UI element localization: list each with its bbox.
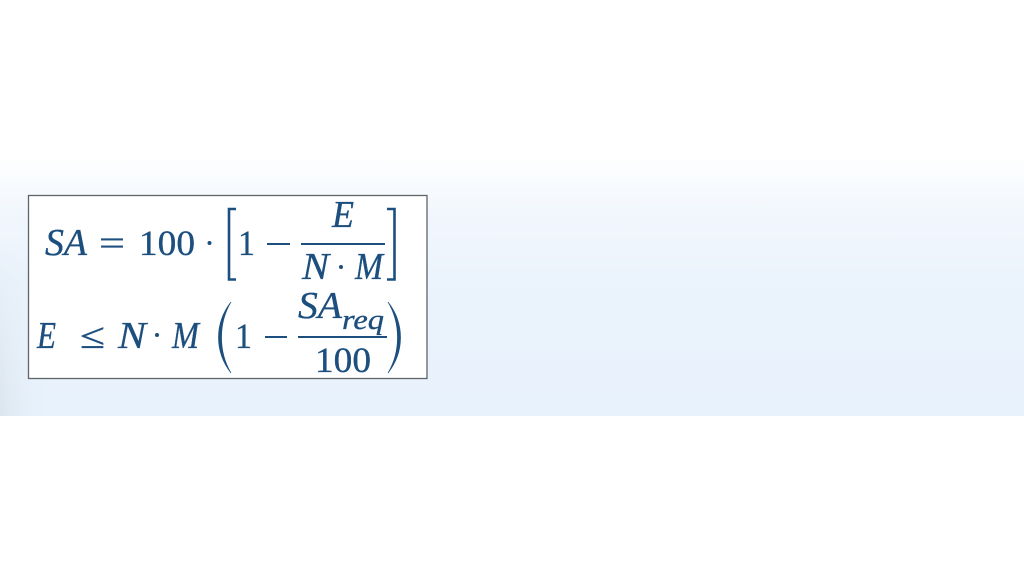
equation: error budget: req <box>342 305 384 336</box>
formula panel <box>28 194 427 380</box>
equation: service availability: = <box>99 223 125 263</box>
equation: error budget <box>36 285 400 380</box>
equation: error budget: SA <box>298 285 343 327</box>
equation: error budget: E <box>36 315 56 357</box>
equation: error budget: 1 <box>235 316 252 356</box>
background band <box>0 189 1024 416</box>
equation: service availability: M <box>354 246 385 288</box>
equation: error budget: 100 <box>315 340 371 380</box>
equation: service availability <box>45 194 394 288</box>
equation: error budget: M <box>171 315 201 357</box>
equation: error budget: N <box>117 315 149 357</box>
equation: service availability: SA <box>45 222 88 264</box>
equation: service availability: E <box>331 194 354 236</box>
equation: service availability: 1 <box>238 223 255 263</box>
equation: error budget: ≤ <box>80 316 105 356</box>
equation: service availability: 100 <box>139 223 195 263</box>
equation: service availability: N <box>301 246 332 288</box>
